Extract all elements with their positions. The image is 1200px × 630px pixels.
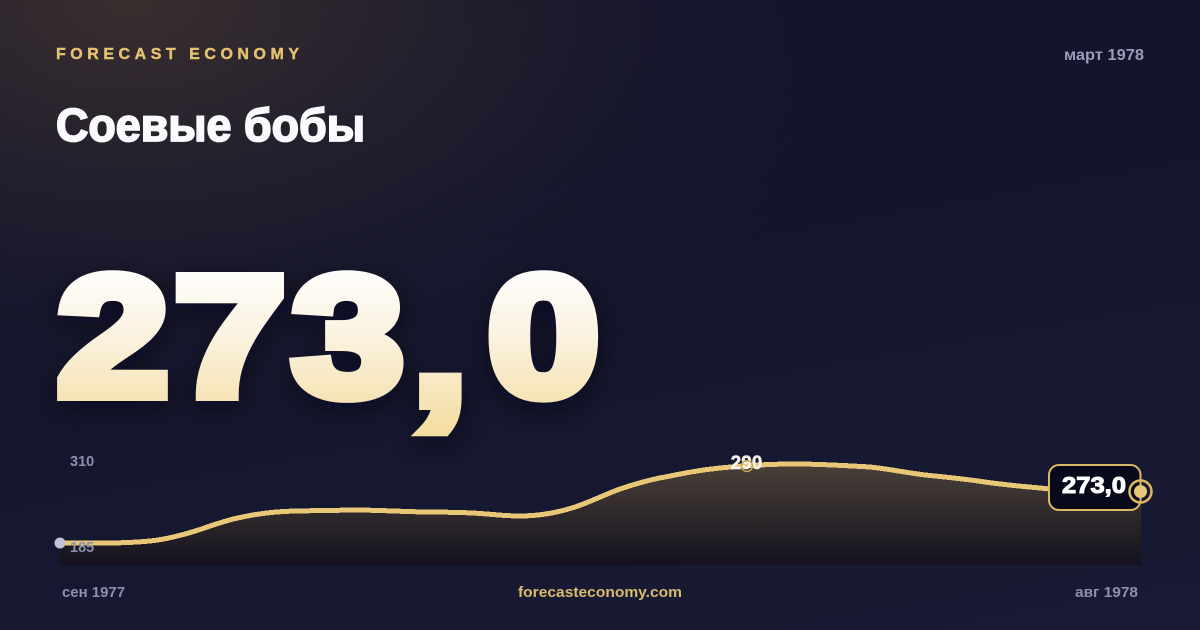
peak marker <box>742 460 752 472</box>
current point marker <box>1130 480 1152 502</box>
date label: март 1978 <box>1064 47 1144 64</box>
start point marker <box>54 538 66 548</box>
brand label: FORECAST ECONOMY <box>56 46 299 63</box>
line chart <box>54 453 1152 565</box>
hero value: 273,0 <box>57 242 599 441</box>
axis start date: сен 1977 <box>62 584 125 601</box>
current value badge <box>1049 465 1140 510</box>
axis label max: 310 <box>70 454 94 470</box>
peak label: 290 <box>731 453 762 474</box>
chart line <box>60 464 1141 543</box>
title: Соевые бобы <box>56 99 365 151</box>
axis end date: авг 1978 <box>1075 584 1138 601</box>
chart area <box>60 464 1141 565</box>
current value badge: 273,0 <box>1062 472 1126 498</box>
source url: forecasteconomy.com <box>518 584 682 601</box>
axis label min: 185 <box>70 540 94 556</box>
